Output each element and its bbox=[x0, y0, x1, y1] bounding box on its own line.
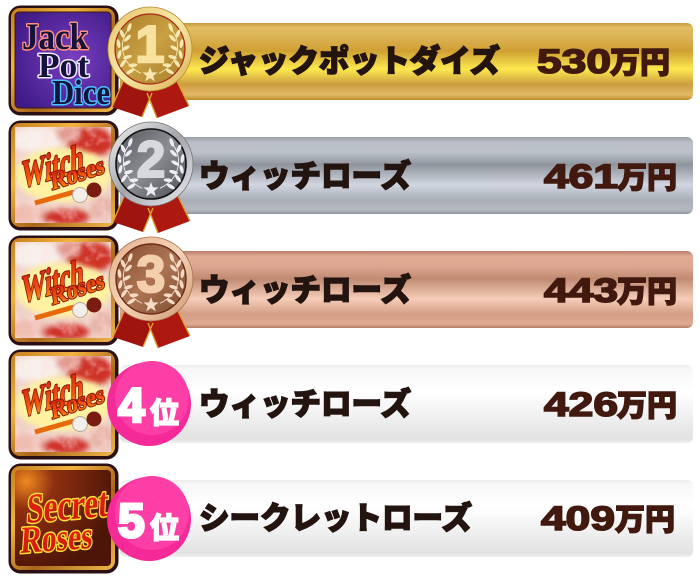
prize 4: 426 bbox=[544, 386, 618, 424]
badge: rank 4 bbox=[107, 361, 191, 446]
row 1 bar: gold bbox=[120, 23, 693, 100]
icon: Secret Roses game: Roses bbox=[19, 515, 94, 562]
game name 4: ウィッチローズ bbox=[199, 387, 411, 422]
medal: rank 3 bronze bbox=[109, 237, 193, 348]
row 3 bar: bronze bbox=[120, 251, 693, 328]
badge: rank 5: 位 bbox=[150, 512, 179, 545]
prize 5 bbox=[541, 500, 675, 538]
prize 1: 万円 bbox=[610, 47, 670, 80]
medal: rank 2 silver bbox=[109, 122, 193, 233]
prize 3: 443 bbox=[544, 272, 618, 310]
prize 5: 万円 bbox=[615, 504, 675, 537]
icon: Jack Pot Dice game: Pot bbox=[38, 46, 89, 85]
game name 2: ウィッチローズ bbox=[199, 159, 411, 194]
prize 3: 万円 bbox=[617, 276, 677, 309]
prize 4 bbox=[544, 386, 677, 424]
row 4 bar: white bbox=[120, 365, 693, 443]
badge: rank 4: 4 bbox=[118, 380, 145, 433]
icon: Witch Roses game (rank 3) bbox=[6, 236, 118, 346]
medal: rank 3 bronze: 3 bbox=[137, 246, 165, 304]
game name 5: シークレットローズ bbox=[199, 501, 472, 536]
badge: rank 5 bbox=[107, 476, 191, 561]
badge: rank 5: 5 bbox=[118, 495, 145, 548]
icon: Secret Roses game bbox=[8, 464, 118, 574]
icon: Jack Pot Dice game: Jack bbox=[22, 17, 88, 58]
icon: Jack Pot Dice game bbox=[8, 6, 118, 116]
prize 5: 409 bbox=[541, 500, 615, 538]
prize 2: 461 bbox=[544, 158, 618, 196]
icon: Witch Roses game (rank 2) bbox=[6, 120, 118, 230]
prize 1 bbox=[537, 43, 670, 81]
row 5 bar: white bbox=[120, 480, 693, 557]
medal: rank 1 gold bbox=[108, 7, 192, 118]
prize 2 bbox=[544, 158, 677, 196]
row 2 bar: silver bbox=[120, 137, 693, 214]
icon: Secret Roses game: Secret bbox=[25, 479, 110, 533]
medal: rank 1 gold: 1 bbox=[136, 16, 164, 74]
game name 1: ジャックポットダイズ bbox=[199, 44, 500, 79]
medal: rank 2 silver: 2 bbox=[137, 131, 165, 189]
prize 4: 万円 bbox=[617, 390, 677, 423]
prize 3 bbox=[544, 272, 677, 310]
icon: Jack Pot Dice game: Dice bbox=[52, 73, 110, 112]
prize 2: 万円 bbox=[617, 162, 677, 195]
badge: rank 4: 位 bbox=[150, 397, 179, 430]
game name 3: ウィッチローズ bbox=[199, 273, 411, 308]
prize 1: 530 bbox=[537, 43, 611, 81]
icon: Witch Roses game (rank 4) bbox=[6, 350, 118, 460]
